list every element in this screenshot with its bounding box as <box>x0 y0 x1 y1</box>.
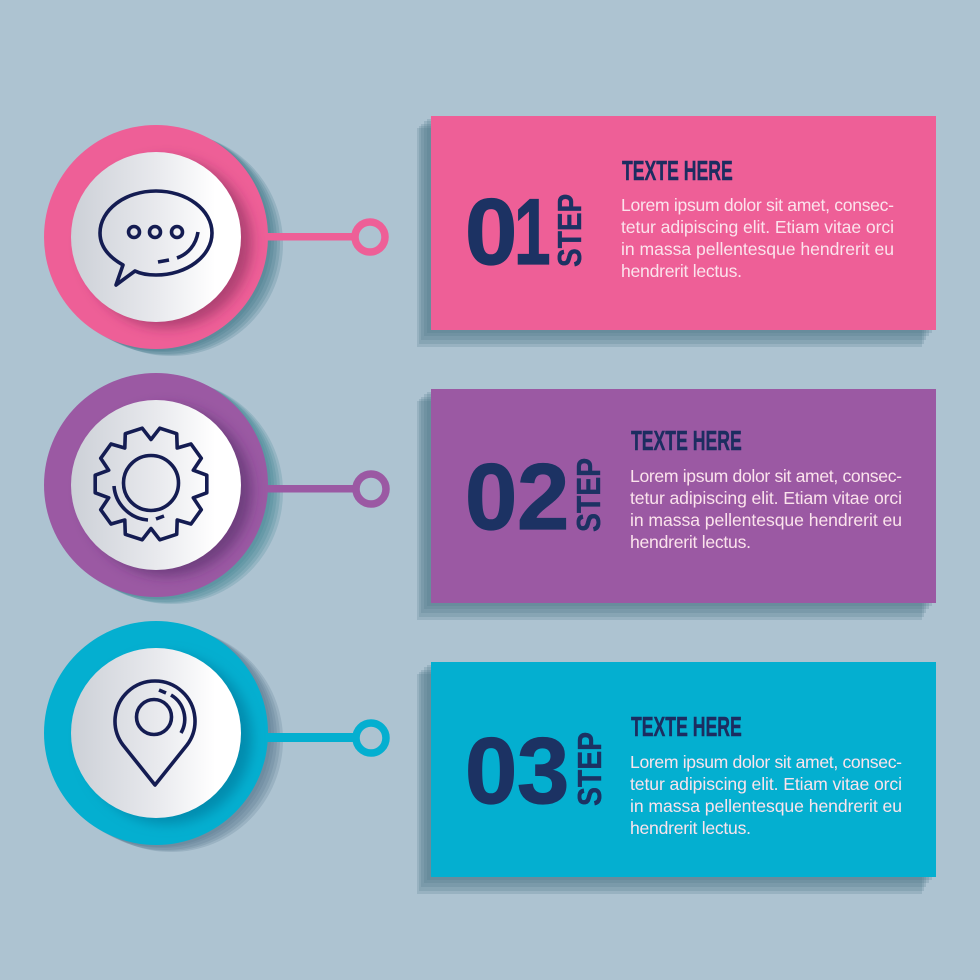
step number: 1 <box>514 181 551 285</box>
step number: 0 <box>465 444 517 549</box>
icon: gear <box>95 428 207 540</box>
text block: hendrerit lectus. <box>630 532 751 552</box>
outer ring <box>44 621 268 845</box>
text block: hendrerit lectus. <box>630 818 751 838</box>
inner disc <box>71 152 241 322</box>
inner disc shadow <box>82 158 252 328</box>
icon: speech bubble <box>100 191 212 285</box>
panel: step 3 card <box>417 662 936 894</box>
icon: map pin <box>115 681 195 785</box>
text block: tetur adipiscing elit. Etiam vitae orci <box>630 774 902 794</box>
card background <box>431 662 936 877</box>
panel: step 2 node <box>44 373 386 604</box>
connector ring <box>356 723 386 753</box>
node shadow <box>47 375 283 604</box>
text block: in massa pellentesque hendrerit eu <box>621 239 894 259</box>
text block: hendrerit lectus. <box>621 261 742 281</box>
step number <box>465 718 569 823</box>
heading: TEXTE HERE <box>622 155 733 186</box>
panel: step 3 node <box>44 621 386 852</box>
text block <box>621 195 894 281</box>
connector ring <box>356 474 386 504</box>
text block: Lorem ipsum dolor sit amet, consec- <box>630 466 902 486</box>
connector line <box>262 485 362 492</box>
connector line <box>262 233 362 240</box>
node shadow <box>47 623 283 852</box>
heading: TEXTE HERE <box>631 711 742 742</box>
inner disc <box>71 400 241 570</box>
card background <box>431 389 936 603</box>
text block: tetur adipiscing elit. Etiam vitae orci <box>621 217 894 237</box>
step number: 0 <box>465 179 517 284</box>
node shadow <box>47 127 283 356</box>
outer ring <box>44 373 268 597</box>
inner disc shadow <box>82 406 252 576</box>
step number: 0 <box>465 718 517 823</box>
step number <box>465 179 551 285</box>
connector line <box>262 733 362 742</box>
connector ring <box>355 222 385 252</box>
text block <box>630 466 902 552</box>
panel: step 2 card <box>417 389 936 620</box>
card stacked shadow <box>417 665 932 894</box>
text block: Lorem ipsum dolor sit amet, consec- <box>621 195 894 215</box>
panel: step 1 node <box>44 125 385 356</box>
text block: tetur adipiscing elit. Etiam vitae orci <box>630 488 902 508</box>
text block: Lorem ipsum dolor sit amet, consec- <box>630 752 902 772</box>
card stacked shadow <box>417 119 932 347</box>
step number <box>465 444 569 549</box>
inner disc <box>71 648 241 818</box>
text block: in massa pellentesque hendrerit eu <box>630 796 902 816</box>
inner disc shadow <box>82 654 252 824</box>
text block: in massa pellentesque hendrerit eu <box>630 510 902 530</box>
step label: STEP <box>570 458 608 532</box>
card stacked shadow <box>417 392 932 620</box>
outer ring <box>44 125 268 349</box>
step number: 3 <box>517 718 569 823</box>
step number: 2 <box>517 444 569 549</box>
card background <box>431 116 936 330</box>
step label: STEP <box>552 194 589 267</box>
panel: step 1 card <box>417 116 936 347</box>
text block <box>630 752 902 838</box>
step label: STEP <box>571 732 609 806</box>
heading: TEXTE HERE <box>631 425 742 456</box>
